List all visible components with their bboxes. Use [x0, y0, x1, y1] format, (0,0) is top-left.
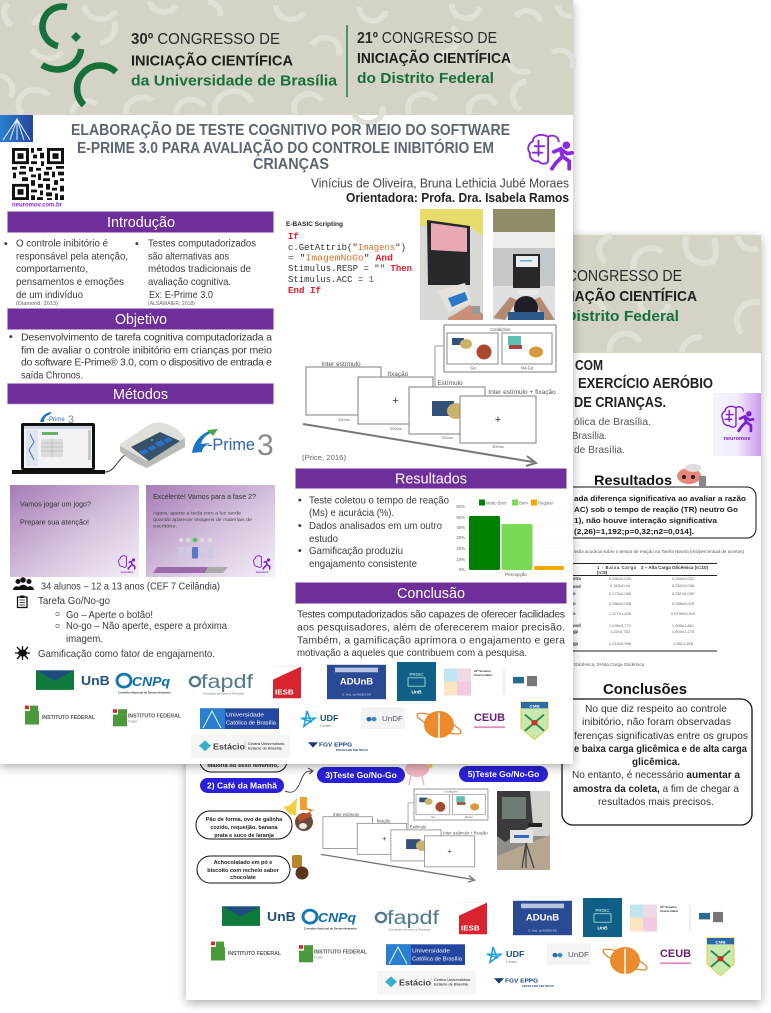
sponsors logos (front poster): 24ª Semana: [474, 669, 491, 673]
header text: university congress: INICIAÇÃO CIENTÍFICA: [131, 52, 293, 70]
header text: federal district congress: 21º CONGRESSO DE: [357, 30, 497, 47]
back poster affiliations: Brasília.: [572, 431, 607, 442]
code block: E-BASIC script: E-BASIC Scripting: [286, 221, 343, 228]
divider: [346, 25, 348, 97]
sponsors logos (back poster): fapdf: [387, 908, 439, 929]
section: Introdução: [4, 212, 274, 307]
sponsors logos (back poster): Estácio: [399, 978, 431, 987]
bar chart: perception: Percepção: [505, 572, 527, 577]
sponsors logos (back poster): Centro: [506, 960, 517, 964]
code block: E-BASIC script: If: [288, 232, 299, 242]
diagram: Go/No-Go sequence (small): Condições: [444, 789, 458, 793]
conditions panel: No-Go: [521, 366, 534, 370]
results table: gp: [573, 641, 579, 646]
text: Go/No-go task: Go – Aperte o botão!: [66, 609, 153, 621]
table caption: ssão acurácia sobre o tempo de reação na Tarefa Neutra (ms/percentual de acertos): [574, 549, 745, 554]
results table: 0,252±0,038: [672, 583, 695, 588]
sponsors logos (front poster): S. Sind. do ANDES-SN: [342, 693, 371, 696]
conclusions box: e baixa carga glicêmica e de alta carga: [574, 743, 747, 755]
sponsors logos (front poster): CMB: [529, 704, 540, 708]
text: results list: [298, 494, 449, 570]
text: objective: Desenvolvimento de tarefa cognitiva computadorizada a: [21, 332, 272, 344]
back poster title: EXERCÍCIO AERÓBIO: [578, 374, 713, 392]
text: inhibitory control: (Diamond, 2013): [16, 301, 58, 307]
text: computerized tests: são alternativas aos: [148, 250, 229, 262]
text: results list: Teste coletou o tempo de reação: [309, 494, 449, 506]
diagram: Go/No-Go sequence (small): fixação: [377, 819, 391, 824]
back poster affiliations: ólica de Brasília.: [574, 417, 651, 428]
back poster title: COM: [575, 358, 603, 374]
title: E-PRIME 3.0 PARA AVALIAÇÃO DO CONTROLE INIBITÓRIO EM: [77, 137, 494, 157]
icon: brain character: [405, 761, 432, 785]
results table: stra: [573, 576, 581, 581]
screen: stimulus: [409, 380, 485, 440]
text: results list: Dados analisados em um outro: [309, 520, 442, 532]
results table: (n=9): [597, 570, 608, 575]
sponsors logos (back poster): INSTITUTO FEDERAL: [314, 950, 367, 955]
text: computerized tests: métodos tradicionais de: [148, 263, 251, 275]
sponsors logos (back poster): FGV EPPG: [505, 978, 538, 985]
panel: front poster: [0, 0, 573, 764]
icon: E-Prime small logo: [40, 412, 74, 426]
pill: 3) Teste Go/No-Go: [317, 767, 405, 783]
screen: inter stimulus: [306, 361, 381, 422]
results table: 0,286±0,038: [609, 601, 632, 606]
text: Go/No-go task: Tarefa Go/No-go: [38, 595, 110, 607]
heading bar: [8, 308, 274, 330]
text: inhibitory control: responsável pela atenção,: [16, 250, 128, 262]
photo: child at laptop from behind: [493, 209, 555, 320]
icon: neuromov brain and runner: [528, 135, 572, 169]
section: Métodos: [8, 384, 275, 660]
sponsors logos (front poster): Centro Universitário: [248, 742, 285, 746]
heading: Resultados: Resultados: [594, 472, 672, 488]
screen: inter stimulus and fixation: Inter estímulo + fixação: [488, 389, 556, 396]
section: Resultados: [296, 468, 566, 577]
table footnote: Glicêmica, 2ªAlta Carga Glicêmica: [574, 662, 645, 667]
game slide 1: Prepare sua atenção!: [20, 518, 89, 526]
chart legend: [479, 500, 554, 506]
text: inhibitory control: •: [4, 238, 8, 250]
text: Go/No-go task: imagem.: [66, 633, 103, 645]
QR caption: neuromov.com.br: [12, 202, 63, 208]
results table: 1,377±1,426: [609, 611, 632, 616]
text: results list: (Ms) e acurácia (%).: [309, 507, 394, 519]
title: [71, 119, 510, 173]
Chronos device with cable: [105, 423, 185, 472]
diagram: Go/No-Go sequence (small): +: [448, 847, 452, 856]
results table: 0,246±0,033: [609, 576, 632, 581]
results table: 0,254±0,032: [672, 576, 695, 581]
heading bar: Introdução: [107, 214, 175, 231]
sponsors logos (back poster): S. Sind. do ANDES-SN: [528, 929, 557, 932]
icon: chocolate drink and cookie: [292, 855, 308, 880]
sponsors logos (front poster): Universidade: [226, 713, 264, 718]
text: results list: estudo: [309, 533, 338, 545]
results table: 1,039±0,771: [609, 623, 632, 628]
header text: university congress: da Universidade de Brasília: [131, 72, 338, 90]
sponsors logos (front poster): IESB: [275, 688, 294, 696]
icon: neuromov logo box: [713, 393, 761, 456]
results table: 0,268±0,029: [672, 601, 695, 606]
icon: E-Prime 3 logo: -Prime: [207, 435, 255, 454]
conclusions box: No entanto, é necessário aumentar a: [572, 769, 740, 781]
results summary box: ada diferença significativa ao avaliar a razão: [574, 494, 747, 503]
arrow: time: [303, 424, 536, 466]
text: results list: •: [298, 494, 302, 506]
game slide 2: Agora, aperte a tecla com a luz verde: [153, 510, 242, 516]
results table: 1,504±1,278: [672, 629, 695, 634]
header text: university congress: [131, 31, 338, 90]
pill: 2) Café da Manhã: [200, 778, 284, 793]
bar chart: perception: [456, 500, 566, 577]
text: conclusion: motivação a aqueles que contribuem com a pesquisa.: [297, 647, 527, 659]
results table: 1,995±1,861: [672, 623, 695, 628]
panel: back poster: [186, 235, 761, 1000]
game slide 1: Vamos jogar um jogo?: [20, 500, 91, 508]
sponsors logos (front poster): PROIC: [409, 672, 424, 677]
diagram: Go/No-Go sequence (small): Go: [431, 815, 435, 819]
section: Objetivo: [8, 308, 274, 382]
screen: inter stimulus and fixation: [460, 389, 556, 449]
sponsors logos (back poster): CEUB: [660, 948, 691, 960]
results table: o: [573, 591, 576, 596]
text: objective: fim de avaliar o controle inibitório em crianças por meio: [21, 344, 272, 356]
text: conclusion: [297, 608, 565, 659]
code block: E-BASIC script: Stimulus.ACC = 1: [288, 275, 374, 285]
sponsors logos (back poster): IESB: [461, 924, 480, 932]
pill: chocolate and biscuit: Achocolatado em pó e: [214, 860, 272, 866]
heading bar: [8, 212, 274, 232]
header text: university congress: 30º CONGRESSO DE: [131, 31, 280, 48]
pill: 5) Teste Go/No-Go: 5)Teste Go/No-Go: [468, 769, 539, 779]
icon: congress logo: [42, 6, 116, 105]
icon: gamification splash: [15, 646, 30, 660]
bar chart: perception: 40%: [456, 525, 465, 530]
sponsors logos (front poster): INSTITUTO FEDERAL: [42, 715, 95, 721]
results table: 0,9730±0,919: [671, 611, 696, 616]
header text: federal district congress: [357, 30, 511, 87]
bar chart: perception: 60%: [456, 504, 465, 509]
text: inhibitory control: [4, 238, 128, 307]
results table: 0,273±0,055: [609, 591, 632, 596]
code block: E-BASIC script: = "ImagemNoGo " And: [288, 254, 393, 264]
icon: E-Prime small logo: 3: [68, 414, 74, 426]
diagram: Go/No-Go sequence (small): Inter estímulo: [333, 812, 360, 817]
sponsors logos (front poster): ESCOLA DE POLÍTICAS: [336, 747, 368, 752]
icon: breakfast foods: [284, 797, 314, 831]
results table: o: [573, 611, 576, 616]
code block: E-BASIC script: c.GetAttrib("Imagens"): [288, 243, 406, 253]
icon: clipboard: [18, 596, 27, 608]
results table: 1,58±1,818: [673, 641, 694, 646]
game slide 2: quando aparecer imagens de materiais de: [153, 517, 253, 522]
diagram: Go/No-Go sequence (small): Inter estímulo + fixação: [443, 831, 488, 836]
heading bar: Conclusão: [397, 585, 465, 602]
back poster header banner: [186, 235, 761, 353]
title: CRIANÇAS: [253, 156, 329, 173]
sponsors logos (back poster): Fundação de Apoio à Pesquisa: [389, 928, 431, 932]
results table: ood: [573, 623, 581, 628]
code block: E-BASIC script: [286, 221, 412, 296]
header text: federal district congress: do Distrito Federal: [357, 70, 494, 87]
text: objective: •: [9, 331, 13, 343]
text: Go/No-go task: [38, 595, 227, 645]
icon: E-Prime small logo: -Prime: [47, 417, 65, 423]
photo: child pressing button device: [420, 209, 483, 320]
results table: 1 - Baixa Carga: [597, 565, 637, 570]
back header text: state congress: do Distrito Federal: [542, 308, 679, 325]
game slide 2: neuromov: [256, 570, 269, 574]
icon: university logo: [0, 115, 33, 142]
results summary box: (2,26)=1,192;p=0,32;n2=0,014].: [574, 527, 694, 536]
game slide 2: [146, 485, 275, 577]
results table: 1,22±0,752: [610, 629, 631, 634]
icon: group of students: [13, 577, 34, 590]
results table: o: [573, 601, 576, 606]
screen: stimulus: Estímulo: [437, 380, 463, 387]
text: sample: 34 alunos – 12 a 13 anos (CEF 7 Ceilândia): [41, 580, 220, 592]
sponsors logos (back poster): Goiás: [314, 956, 323, 960]
sponsors logos (front poster): UnDF: [382, 714, 403, 723]
results summary box: [540, 487, 756, 538]
text: gamification: Gamificação como fator de engajamento.: [38, 648, 215, 660]
icon: E-Prime 3 logo: 3: [257, 429, 274, 462]
sponsors logos (front poster): [25, 662, 548, 758]
laptop with E-Prime software: [12, 423, 105, 474]
screen: fixation: +: [392, 395, 399, 407]
sponsors logos (front poster): UnB: [411, 690, 422, 696]
conditions panel: [444, 325, 556, 372]
conclusions box: resultados mais precisos.: [598, 796, 714, 808]
text: inhibitory control: O controle inibitório é: [16, 238, 108, 250]
conclusions box: glicêmica.: [632, 756, 680, 768]
conclusions box: No que diz respeito ao controle: [585, 703, 727, 715]
sponsors logos (back poster): UnDF: [568, 950, 589, 959]
screen: inter stimulus: Inter estímulo: [321, 361, 361, 368]
bar chart: perception: 50%: [456, 515, 465, 520]
sponsors logos (front poster): Estácio de Brasília: [248, 747, 283, 750]
text: conclusion: aos pesquisadores, além de oferecerem maior precisão.: [297, 622, 565, 634]
sponsors logos (front poster): INSTITUTO FEDERAL: [128, 714, 181, 719]
chart legend: Regular: [538, 500, 554, 506]
diagram: Go/No-Go sequence (small): [321, 789, 488, 882]
conclusions box: ferenças significativas entre os grupos: [574, 730, 748, 742]
bar chart: perception: 20%: [456, 546, 465, 551]
results table: [540, 564, 717, 651]
game slide 1: [10, 485, 139, 577]
sponsors logos (front poster): ADUnB: [340, 677, 373, 686]
results table: 0,263±0,04: [610, 583, 631, 588]
text: computerized tests: [135, 238, 256, 307]
sponsors logos (front poster): UDF: [320, 713, 338, 723]
text: computerized tests: avaliação cognitiva.: [148, 276, 231, 288]
screen: fixation: [358, 371, 433, 431]
game slide 1: neuromov: [121, 570, 134, 574]
pill: 3) Teste Go/No-Go: 3)Teste Go/No-Go: [325, 770, 397, 780]
sponsors logos (back poster): 24ª Semana: [660, 905, 677, 909]
sponsors logos (back poster): CMB: [715, 940, 726, 944]
sponsors logos (front poster): Estácio: [213, 742, 245, 751]
text: results list: engajamento consistente: [309, 558, 417, 570]
sponsors logos (back poster): INSTITUTO FEDERAL: [228, 951, 281, 957]
sponsors logos (back poster): Centro Universitário: [434, 978, 471, 982]
screen: fixation: fixação: [388, 371, 409, 378]
sponsors logos (back poster): Estácio de Brasília: [434, 983, 469, 986]
text: results list: •: [298, 520, 302, 532]
back header text: state congress: [542, 268, 697, 325]
section: Conclusão: [296, 582, 566, 659]
game slide 2: escritório.: [153, 524, 177, 528]
sponsors logos (front poster): UnB: [81, 674, 110, 688]
diagram: Go/No-Go sequence (small): Estímulo: [410, 825, 427, 830]
screen: stimulus: 750ms: [441, 436, 453, 440]
pill: 2) Café da Manhã: 2) Café da Manhã: [207, 780, 277, 790]
text: inhibitory control: pensamentos e emoções: [16, 276, 124, 288]
conclusions box: amostra da coleta, a fim de chegar a: [573, 783, 739, 795]
pill: 5) Teste Go/No-Go: [459, 766, 548, 782]
diagram: Go/No-Go sequence (small): No-Go: [465, 815, 473, 819]
icon: neuromov logo box: neuromov: [723, 436, 751, 442]
screen: fixation: 500ms: [390, 427, 402, 431]
sponsors logos (front poster): Goiás: [128, 720, 137, 724]
heading bar: Métodos: [113, 386, 168, 403]
conditions panel: Go: [470, 366, 476, 370]
pill: bread and eggs: prata e suco de laranja: [214, 833, 275, 839]
photo: participant setup with tripod: [497, 791, 550, 870]
pill: chocolate and biscuit: [197, 856, 290, 883]
heading bar: [296, 468, 566, 488]
pill: bread and eggs: Pão de forma, ovo de galinha: [206, 817, 283, 823]
QR code: [12, 148, 64, 200]
sponsors logos (back poster): ADUnB: [526, 913, 559, 922]
sponsors logos (back poster): Conselho Nacional de Desenvolvimento: [304, 927, 357, 931]
heading bar: Objetivo: [115, 311, 167, 328]
arrow: curved to step 3: [285, 768, 313, 792]
diagram: Go/No-Go sequence: [303, 325, 556, 466]
sponsors logos (back poster): UnB: [267, 910, 296, 924]
text: conclusion: Também, a gamificação aprimora o engajamento e gera: [297, 634, 565, 646]
sponsors logos (back poster): PROIC: [595, 908, 610, 913]
pill: bread and eggs: cozido, requeijão, banana: [210, 825, 279, 831]
sponsors logos (back poster): [211, 898, 734, 994]
results summary box: 1), não houve interação significativa: [574, 516, 718, 525]
sponsors logos (back poster): UDF: [506, 949, 524, 959]
heading bar: Resultados: [395, 470, 467, 488]
back header text: state congress: INICIAÇÃO CIENTÍFICA: [543, 287, 697, 305]
pill: chocolate and biscuit: chocolate: [230, 875, 256, 881]
sponsors logos (back poster): CNPq: [318, 911, 357, 925]
bar chart: perception: 0%: [459, 567, 465, 572]
chart legend: Muito Bom: [486, 500, 507, 506]
screen: inter stimulus and fixation: +: [495, 414, 501, 426]
advisor: Orientadora: Profa. Dra. Isabela Ramos: [346, 190, 569, 205]
sponsors logos (front poster): Universitária: [474, 673, 492, 677]
sponsors logos (back poster): Católica de Brasília: [412, 957, 463, 962]
conclusions box: [562, 699, 752, 825]
text: Go/No-go task: No-go – Não aperte, espere a próxima: [66, 620, 227, 632]
sponsors logos (back poster): Universidade: [412, 949, 450, 954]
text: objective: do software E-Prime® 3.0, com o dispositivo de entrada e: [21, 356, 272, 368]
sponsors logos (back poster): ESCOLA DE POLÍTICAS: [522, 983, 554, 988]
text: computerized tests: (ALSAWAIER, 2018): [148, 301, 195, 307]
authors: Vinícius de Oliveira, Bruna Lethicia Jubé Moraes: [311, 176, 569, 190]
heading bar: [296, 582, 566, 604]
text: results list: •: [298, 545, 302, 557]
screen: inter stimulus: 500ms: [338, 418, 350, 422]
back poster title: [574, 358, 713, 411]
header text: federal district congress: INICIAÇÃO CIENTÍFICA: [357, 49, 511, 67]
screen: inter stimulus and fixation: 500ms: [492, 445, 504, 449]
sponsors logos (front poster): Conselho Nacional de Desenvolvimento: [118, 691, 171, 695]
conditions panel: Condições: [490, 327, 510, 332]
text: inhibitory control: comportamento,: [16, 263, 88, 275]
title: ELABORAÇÃO DE TESTE COGNITIVO POR MEIO DO SOFTWARE: [71, 119, 510, 139]
heading bar: [8, 384, 274, 404]
sponsors logos (front poster): Católica de Brasília: [226, 721, 277, 726]
text: inhibitory control: de um indivíduo: [16, 289, 83, 301]
code block: E-BASIC script: Stimulus.RESP = "" Then: [288, 264, 412, 274]
icon: E-Prime 3 logo: [192, 429, 274, 462]
sponsors logos (front poster): Fundação de Apoio à Pesquisa: [203, 692, 245, 696]
citation: (Price, 2016): [302, 453, 347, 462]
sponsors logos (front poster): Centro: [320, 724, 331, 728]
back header text: state congress: 21º CONGRESSO DE: [542, 268, 682, 285]
pill: participants: [200, 750, 287, 772]
results table: 1,213±0,996: [609, 641, 632, 646]
text: computerized tests: •: [135, 238, 139, 250]
sponsors logos (back poster): Universitária: [660, 909, 678, 913]
heading: Conclusões: Conclusões: [603, 682, 687, 698]
bar chart: perception: 30%: [456, 535, 465, 540]
text: computerized tests: Ex: E-Prime 3.0: [149, 289, 213, 301]
back poster affiliations: [572, 417, 651, 456]
diagram: Go/No-Go sequence (small): +: [382, 834, 386, 843]
icon: brain character with dumbbell: [677, 464, 706, 486]
back poster affiliations: de Brasília.: [574, 445, 625, 456]
text: results list: Gamificação produziu: [309, 545, 403, 557]
bar chart: perception: 10%: [456, 557, 465, 562]
pill: bread and eggs: [196, 811, 292, 839]
sponsors logos (front poster): fapdf: [201, 672, 253, 693]
sponsors logos (front poster): CEUB: [474, 712, 505, 724]
back poster title: DE CRIANÇAS.: [574, 395, 666, 411]
sponsors logos (front poster): FGV EPPG: [319, 742, 352, 749]
text: objective: saída Chronos.: [21, 370, 83, 382]
results summary box: AC) sob o tempo de reação (TR) neutro Go: [574, 505, 739, 514]
results table: ood: [573, 584, 581, 589]
chart legend: Bom: [519, 500, 528, 506]
pill: participants: Maioria do sexo feminino,: [207, 763, 279, 769]
pill: chocolate and biscuit: biscoito com recheio sabor: [207, 868, 280, 874]
text: conclusion: Testes computadorizados são capazes de oferecer facilidades: [297, 608, 565, 620]
results table: gp: [573, 629, 579, 634]
sponsors logos (back poster): UnB: [597, 926, 608, 932]
game slide 2: Excelente! Vamos para a fase 2?: [153, 492, 256, 501]
code block: E-BASIC script: End If: [288, 286, 321, 296]
results table: 2 – Alta Carga Glicêmica (n=10): [641, 565, 709, 570]
text: objective: [9, 331, 272, 382]
text: computerized tests: Testes computadorizados: [148, 238, 256, 250]
results table: 0,257±0,039: [672, 591, 695, 596]
header banner: [0, 0, 573, 123]
sponsors logos (front poster): CNPq: [132, 675, 171, 689]
conclusions box: inibitório, não foram observadas: [582, 716, 731, 728]
